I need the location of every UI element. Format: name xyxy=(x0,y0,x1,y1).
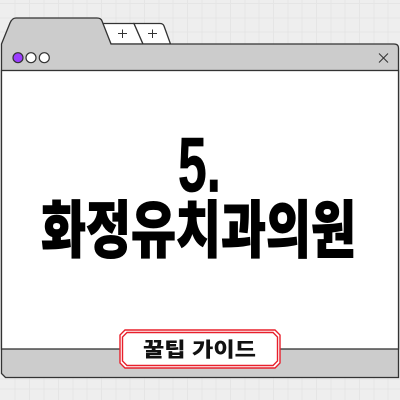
title: 5. xyxy=(178,122,221,208)
badge outline xyxy=(120,330,280,368)
window control dots xyxy=(13,53,49,63)
icon: close xyxy=(379,54,388,62)
tab: plus one xyxy=(102,24,143,44)
browser tabs xyxy=(102,24,170,44)
tip guide badge xyxy=(120,330,280,368)
tab: plus two xyxy=(134,24,170,44)
content area xyxy=(2,70,398,349)
badge text: 꿀팁 가이드 xyxy=(143,338,256,362)
title xyxy=(41,122,356,266)
